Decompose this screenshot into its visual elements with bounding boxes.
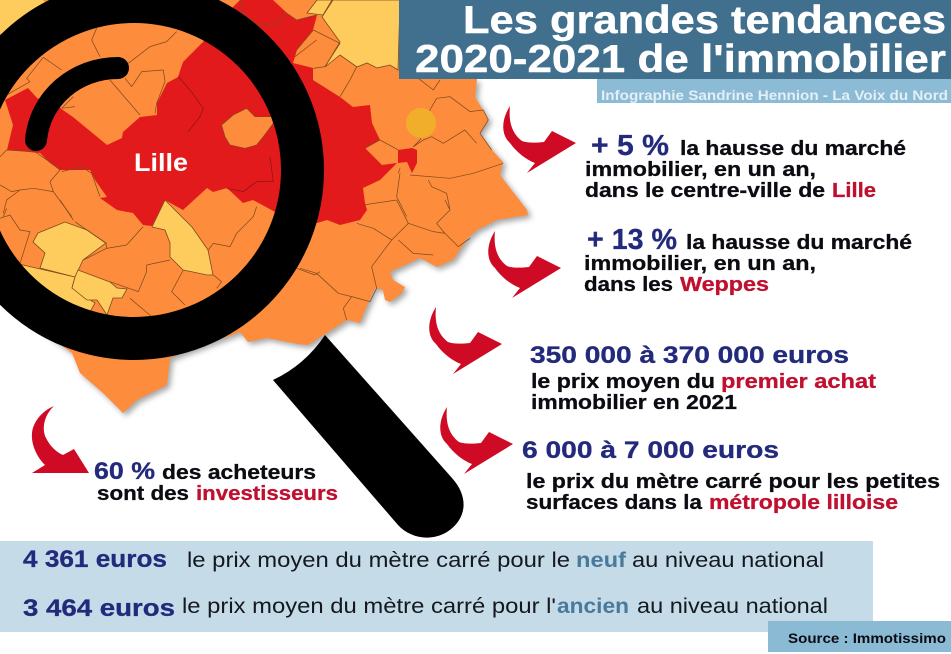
title banner: Les grandes tendances <box>463 0 946 42</box>
map: red communes <box>5 0 417 226</box>
text block: first purchase price: premier achat <box>721 370 876 393</box>
national price: old: au niveau national <box>637 595 828 618</box>
small golden circle on the map <box>406 108 436 138</box>
national price: old <box>23 595 828 622</box>
magnifying glass ring <box>0 2 302 338</box>
title banner <box>399 0 951 81</box>
text block: 60 % investors <box>94 458 338 505</box>
text block: +13 % Weppes: immobilier, en un an, <box>584 252 816 275</box>
text block: first purchase price: le prix moyen du <box>531 370 715 393</box>
text block: price per square metre for small surfaces: surfaces dans la <box>526 491 703 514</box>
source banner <box>768 621 951 652</box>
text block: +13 % Weppes: Weppes <box>680 273 769 296</box>
text block: 60 % investors: 60 % <box>94 458 155 485</box>
text block: 60 % investors: investisseurs <box>196 482 338 505</box>
national price: new <box>23 546 824 573</box>
national price: new: le prix moyen du mètre carré pour le <box>187 549 570 572</box>
credit banner <box>597 79 951 103</box>
arrow: investors <box>32 406 89 473</box>
national price: old: le prix moyen du mètre carré pour l' <box>182 595 556 618</box>
text block: 60 % investors: sont des <box>97 482 189 505</box>
text block: +13 % Weppes: la hausse du marché <box>686 231 912 254</box>
text block: first purchase price <box>530 342 876 414</box>
arrow: Lille centre <box>503 106 576 173</box>
text block: price per square metre for small surfaces <box>522 437 940 514</box>
national price: new: 4 361 euros <box>23 546 167 573</box>
text block: +13 % Weppes: dans les <box>584 273 673 296</box>
map base: orange communes <box>0 0 528 413</box>
text block: +5 % Lille: la hausse du marché <box>680 137 906 160</box>
map of the Lille metropolitan area <box>0 0 528 413</box>
national price: new: au niveau national <box>632 549 824 572</box>
title banner: 2020-2021 de l'immobilier <box>415 38 946 81</box>
map: orange commune inside the red zone <box>222 108 273 148</box>
text block: +5 % Lille: immobilier, en un an, <box>585 158 816 181</box>
text block: +5 % Lille: Lille <box>832 179 876 202</box>
text block: +13 % Weppes: + 13 % <box>587 224 677 256</box>
text block: first purchase price: 350 000 à 370 000 euros <box>530 342 849 369</box>
text block: +5 % Lille <box>585 130 906 202</box>
panel: national prices <box>0 541 873 632</box>
magnifying glass highlight <box>36 68 118 140</box>
national price: old: 3 464 euros <box>23 595 175 622</box>
text block: price per square metre for small surfaces: métropole lilloise <box>709 491 898 514</box>
arrow: small surfaces <box>440 407 513 474</box>
arrow: first purchase <box>429 307 502 374</box>
map label: Lille: Lille <box>134 149 188 177</box>
text block: 60 % investors: des acheteurs <box>162 461 316 484</box>
magnifying glass handle <box>273 335 464 538</box>
magnifying glass <box>0 2 464 538</box>
text block: first purchase price: immobilier en 2021 <box>531 391 737 414</box>
national price: new: neuf <box>576 549 627 572</box>
national price: old: ancien <box>557 595 629 618</box>
text block: price per square metre for small surfaces: 6 000 à 7 000 euros <box>522 437 779 464</box>
map: yellow communes <box>0 0 400 330</box>
text block: price per square metre for small surfaces: le prix du mètre carré pour les petites <box>526 470 940 493</box>
map: commune borders <box>0 0 503 320</box>
credit banner: Infographie Sandrine Hennion - La Voix du Nord <box>601 88 948 103</box>
text block: +13 % Weppes <box>584 224 912 296</box>
text block: +5 % Lille: + 5 % <box>591 130 669 162</box>
arrow: Weppes <box>488 231 561 298</box>
source banner: Source : Immotissimo <box>788 631 946 646</box>
text block: +5 % Lille: dans le centre-ville de <box>585 179 825 202</box>
